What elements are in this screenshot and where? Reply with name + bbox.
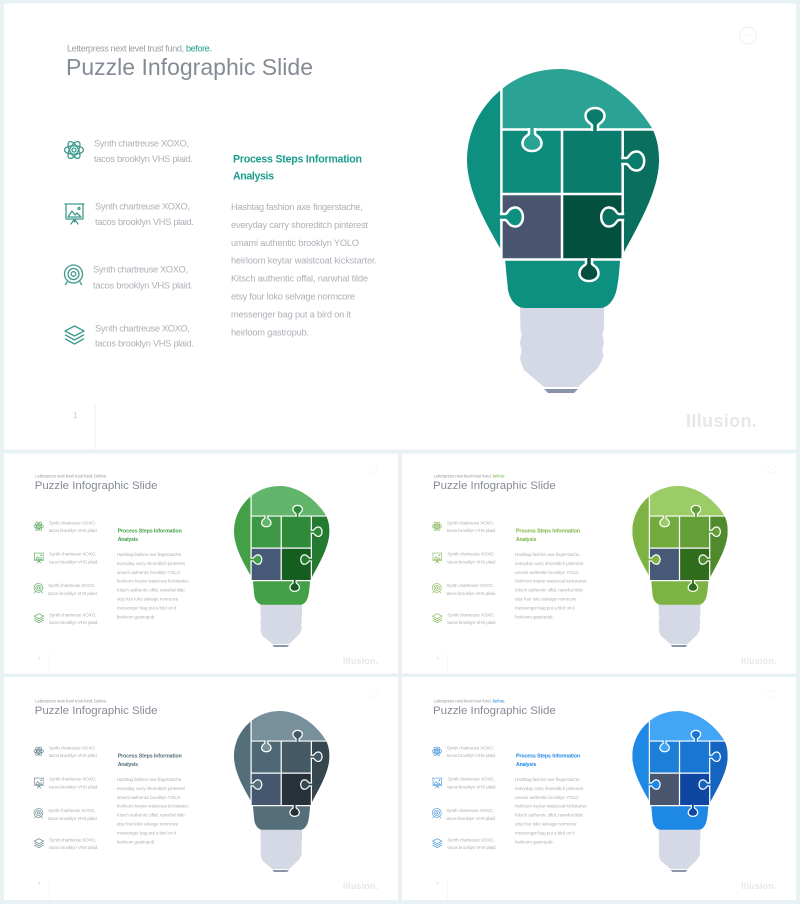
heading: Analysis [118,537,138,543]
bulb bottom piece [253,580,311,605]
item 3 text: Synth chartreuse XOXO, [446,583,494,588]
knob: up [691,730,701,742]
bulb screw base [659,829,700,869]
icon: presentation board [433,778,442,788]
knob: up [293,730,302,742]
item 3 text: Synth chartreuse XOXO, [93,265,188,275]
bulb cap [671,870,687,872]
puzzle light bulb [231,707,333,872]
item 1 text: Synth chartreuse XOXO, [447,746,494,751]
knob: left cell [500,208,523,226]
heading [118,529,182,543]
knob: down [522,128,542,151]
cell top left [650,516,680,548]
left strip piece [467,90,500,249]
item 1 text [49,521,98,533]
icon: target [432,583,441,593]
paragraph: heirloom gastropub. [515,614,554,619]
puzzle light bulb [629,482,732,647]
icon: atom [34,521,43,531]
bulb screw base [260,604,302,644]
item 2 text: tacos brooklyn VHS plaid. [49,785,98,790]
item 3 text [48,583,98,596]
knob: right [709,527,720,536]
item 4 text: tacos brooklyn VHS plaid. [447,845,497,850]
item 3 text [48,808,98,821]
icon: presentation board [34,553,44,563]
paragraph: Kitsch authentic offal, narwhal tilde [117,588,185,593]
knob: down [660,515,669,527]
item 4 text: tacos brooklyn VHS plaid. [49,845,98,850]
item 1 text: tacos brooklyn VHS plaid. [94,154,193,164]
brand: Illusion. [686,411,758,431]
knob: down [262,740,271,752]
paragraph: Hashtag fashion axe fingerstache, [117,552,182,557]
knob: right cell [601,208,624,226]
paragraph: umami authentic brooklyn YOLO [231,238,359,248]
item 3 text: Synth chartreuse XOXO, [48,808,95,813]
item 3 text: tacos brooklyn VHS plaid. [446,591,496,596]
icon: menu dots [369,690,378,699]
paragraph: Hashtag fashion axe fingerstache, [515,777,581,782]
subtitle: Letterpress next level trust fund, before. [433,698,506,703]
item 2 text [49,552,98,565]
bulb bottom piece [253,805,311,830]
heading [118,754,182,768]
icon: atom [64,140,84,160]
puzzle light bulb [460,60,667,393]
icon: menu dots [369,465,378,474]
cell top right [680,516,710,548]
item 1 text: tacos brooklyn VHS plaid. [447,528,496,533]
item 1 text [447,746,496,758]
top piece [650,711,724,740]
heading: Analysis [516,762,536,768]
cell bottom right [680,548,710,581]
icon: target [34,808,43,818]
item 2 text [447,777,497,790]
bulb bottom piece [651,805,709,830]
cell top left [650,741,680,773]
item 2 text: tacos brooklyn VHS plaid. [447,785,497,790]
item 4 text [49,612,98,625]
icon: presentation board [65,204,84,224]
item 1 text: Synth chartreuse XOXO, [447,521,494,526]
cell bottom left [650,773,680,806]
right strip piece [312,742,330,802]
bulb cap [272,870,289,872]
cell bottom right [562,194,623,260]
cell top left [251,741,281,773]
cell top left [251,516,281,548]
bulb bottom piece [651,580,709,605]
left strip piece [234,496,250,576]
paragraph: umami authentic brooklyn YOLO [117,570,181,575]
paragraph: everyday carry shoreditch pinterest [515,786,584,791]
knob: right [709,752,720,761]
heading: Analysis [233,170,274,182]
bulb cap [671,645,687,647]
paragraph: umami authentic brooklyn YOLO [515,570,579,575]
paragraph: Kitsch authentic offal, narwhal tilde [117,813,185,818]
heading: Process Steps Information [118,754,182,760]
knob: right cell [699,555,710,564]
page number: 1 [73,411,78,420]
paragraph: Kitsch authentic offal, narwhal tilde [515,588,584,593]
item 4 text: Synth chartreuse XOXO, [447,612,495,617]
knob: left cell [649,780,660,789]
knob: left cell [649,555,660,564]
bulb cap [272,645,289,647]
item 3 text [446,583,496,596]
item 4 text: Synth chartreuse XOXO, [49,837,96,842]
icon: presentation board [34,778,44,788]
paragraph: Kitsch authentic offal, narwhal tilde [231,273,368,283]
slide: slate [34,690,379,900]
item 2 text: tacos brooklyn VHS plaid. [49,560,98,565]
brand: Illusion. [343,656,379,666]
paragraph: heirloom gastropub. [231,327,309,337]
item 3 text: tacos brooklyn VHS plaid. [93,280,193,290]
paragraph: etsy four loko selvage normcore [515,821,577,826]
item 3 text: tacos brooklyn VHS plaid. [446,816,496,821]
bulb screw base [659,604,700,644]
left strip piece [632,722,649,800]
knob: up [586,108,604,131]
item 2 text: Synth chartreuse XOXO, [95,201,190,211]
heading: Process Steps Information [118,529,182,535]
puzzle light bulb [231,482,333,647]
cell top right [281,516,312,548]
paragraph: heirloom gastropub. [117,839,155,844]
item 1 text: Synth chartreuse XOXO, [94,139,189,149]
knob: down [660,740,669,752]
icon: menu dots [740,27,756,44]
paragraph: everyday carry shoreditch pinterest [117,786,186,791]
paragraph: Hashtag fashion axe fingerstache, [515,552,581,557]
title: Puzzle Infographic Slide [433,480,556,492]
paragraph: messenger bag put a bird on it [515,605,575,610]
item 4 text [447,837,497,850]
knob: bottom [688,805,698,816]
paragraph [117,777,189,844]
knob: down [262,515,271,527]
bulb bottom piece [505,259,621,308]
icon: layers [433,614,442,623]
icon: atom [432,746,442,756]
paragraph: umami authentic brooklyn YOLO [117,795,181,800]
paragraph: everyday carry shoreditch pinterest [231,220,368,230]
icon: menu dots [768,465,776,474]
knob: up [293,505,302,517]
item 4 text: Synth chartreuse XOXO, [447,837,495,842]
item 2 text [95,201,194,227]
knob: right [621,152,644,170]
item 3 text: Synth chartreuse XOXO, [446,808,494,813]
paragraph: messenger bag put a bird on it [231,309,351,319]
page number: 5 [436,880,439,885]
cell bottom right [680,773,710,806]
cell bottom left [251,773,281,806]
top piece [650,486,724,516]
page number: 2 [38,655,40,660]
brand: Illusion. [343,881,379,891]
icon: layers [34,614,44,623]
paragraph: heirloom gastropub. [515,839,554,844]
heading [233,154,362,182]
knob: up [691,505,701,517]
icon: target [34,583,43,593]
icon: presentation board [433,553,442,563]
paragraph [231,202,377,337]
item 2 text: tacos brooklyn VHS plaid. [447,560,497,565]
heading: Process Steps Information [516,754,580,760]
paragraph: heirloom keytar waistcoat kickstarter. [117,579,189,584]
slide: lime [432,465,777,675]
item 3 text: tacos brooklyn VHS plaid. [48,591,98,596]
item 3 text: Synth chartreuse XOXO, [48,583,95,588]
subtitle: Letterpress next level trust fund, before. [35,698,107,703]
brand: Illusion. [741,656,777,666]
item 4 text [95,323,194,349]
knob: left cell [250,780,262,789]
item 4 text: Synth chartreuse XOXO, [95,323,190,333]
icon: target [64,265,82,284]
item 2 text [447,552,497,565]
paragraph: etsy four loko selvage normcore [515,596,577,601]
bulb screw base [520,306,604,387]
paragraph: heirloom keytar waistcoat kickstarter. [231,255,377,265]
cell bottom right [281,773,312,806]
knob: left cell [250,555,262,564]
cell bottom right [281,548,312,581]
item 1 text: Synth chartreuse XOXO, [49,521,96,526]
subtitle: Letterpress next level trust fund, before. [35,473,107,478]
slide: green [34,465,379,675]
heading: Analysis [516,537,536,543]
paragraph [515,777,588,844]
right strip piece [624,130,659,253]
item 2 text: tacos brooklyn VHS plaid. [95,217,194,227]
item 4 text: tacos brooklyn VHS plaid. [95,339,194,349]
paragraph: messenger bag put a bird on it [117,605,177,610]
item 4 text: Synth chartreuse XOXO, [49,612,96,617]
paragraph: heirloom keytar waistcoat kickstarter. [515,804,588,809]
cell top right [281,741,312,773]
paragraph: everyday carry shoreditch pinterest [515,561,584,566]
title: Puzzle Infographic Slide [66,54,313,80]
cell top right [680,741,710,773]
brand: Illusion. [741,881,777,891]
paragraph [117,552,189,619]
icon: layers [433,839,442,848]
item 3 text [93,265,193,290]
icon: menu dots [768,690,776,699]
heading [516,529,580,543]
knob: bottom [580,258,598,281]
item 1 text: tacos brooklyn VHS plaid. [49,753,98,758]
top piece [502,69,652,128]
knob: right cell [301,780,312,789]
paragraph: heirloom keytar waistcoat kickstarter. [117,804,189,809]
right strip piece [710,516,728,578]
heading: Process Steps Information [516,529,580,535]
paragraph: messenger bag put a bird on it [515,830,575,835]
paragraph: umami authentic brooklyn YOLO [515,795,579,800]
right strip piece [710,742,728,803]
knob: bottom [290,580,299,591]
paragraph: heirloom gastropub. [117,614,155,619]
knob: bottom [688,580,698,591]
item 4 text: tacos brooklyn VHS plaid. [49,620,98,625]
paragraph [515,552,588,619]
bulb screw base [260,829,302,869]
title: Puzzle Infographic Slide [35,705,157,717]
cell top left [502,130,562,194]
heading [516,754,580,768]
page number: 3 [436,655,439,660]
paragraph: heirloom keytar waistcoat kickstarter. [515,579,588,584]
top piece [252,486,326,516]
item 3 text: tacos brooklyn VHS plaid. [48,816,98,821]
heading: Analysis [118,762,138,768]
paragraph: Kitsch authentic offal, narwhal tilde [515,813,584,818]
cell bottom left [251,548,281,581]
knob: right [311,527,322,536]
paragraph: etsy four loko selvage normcore [117,596,179,601]
left strip piece [632,496,649,576]
left strip piece [234,722,250,800]
item 1 text: tacos brooklyn VHS plaid. [49,528,98,533]
icon: target [432,808,441,818]
knob: right cell [699,780,710,789]
item 1 text: Synth chartreuse XOXO, [49,746,96,751]
puzzle light bulb [629,707,732,872]
slide: blue [432,690,777,900]
page number: 4 [38,880,41,885]
item 1 text [447,521,496,533]
paragraph: etsy four loko selvage normcore [117,821,179,826]
item 4 text [49,837,98,850]
item 2 text: Synth chartreuse XOXO, [49,777,96,782]
paragraph: Hashtag fashion axe fingerstache, [231,202,363,212]
title: Puzzle Infographic Slide [35,480,157,492]
top piece [252,711,326,740]
cell bottom left [502,194,562,260]
icon: atom [432,521,442,531]
item 1 text [94,139,193,164]
bulb cap [544,389,578,393]
paragraph: Hashtag fashion axe fingerstache, [117,777,182,782]
cell top right [562,130,623,194]
title: Puzzle Infographic Slide [433,705,556,717]
subtitle: Letterpress next level trust fund, before. [67,44,212,54]
item 2 text [49,777,98,790]
knob: bottom [290,805,299,816]
icon: layers [65,326,84,344]
item 2 text: Synth chartreuse XOXO, [49,552,96,557]
item 3 text [446,808,496,821]
item 2 text: Synth chartreuse XOXO, [447,552,495,557]
item 1 text: tacos brooklyn VHS plaid. [447,753,496,758]
item 4 text: tacos brooklyn VHS plaid. [447,620,497,625]
item 4 text [447,612,497,625]
paragraph: messenger bag put a bird on it [117,830,177,835]
right strip piece [312,516,330,577]
heading: Process Steps Information [233,154,362,166]
knob: right cell [301,555,312,564]
slide: teal main [64,27,758,449]
icon: layers [34,839,44,848]
knob: right [311,752,322,761]
paragraph: etsy four loko selvage normcore [231,291,355,301]
subtitle: Letterpress next level trust fund, before. [433,473,506,478]
paragraph: everyday carry shoreditch pinterest [117,561,186,566]
item 2 text: Synth chartreuse XOXO, [447,777,495,782]
item 1 text [49,746,98,758]
cell bottom left [650,548,680,581]
icon: atom [34,746,43,756]
